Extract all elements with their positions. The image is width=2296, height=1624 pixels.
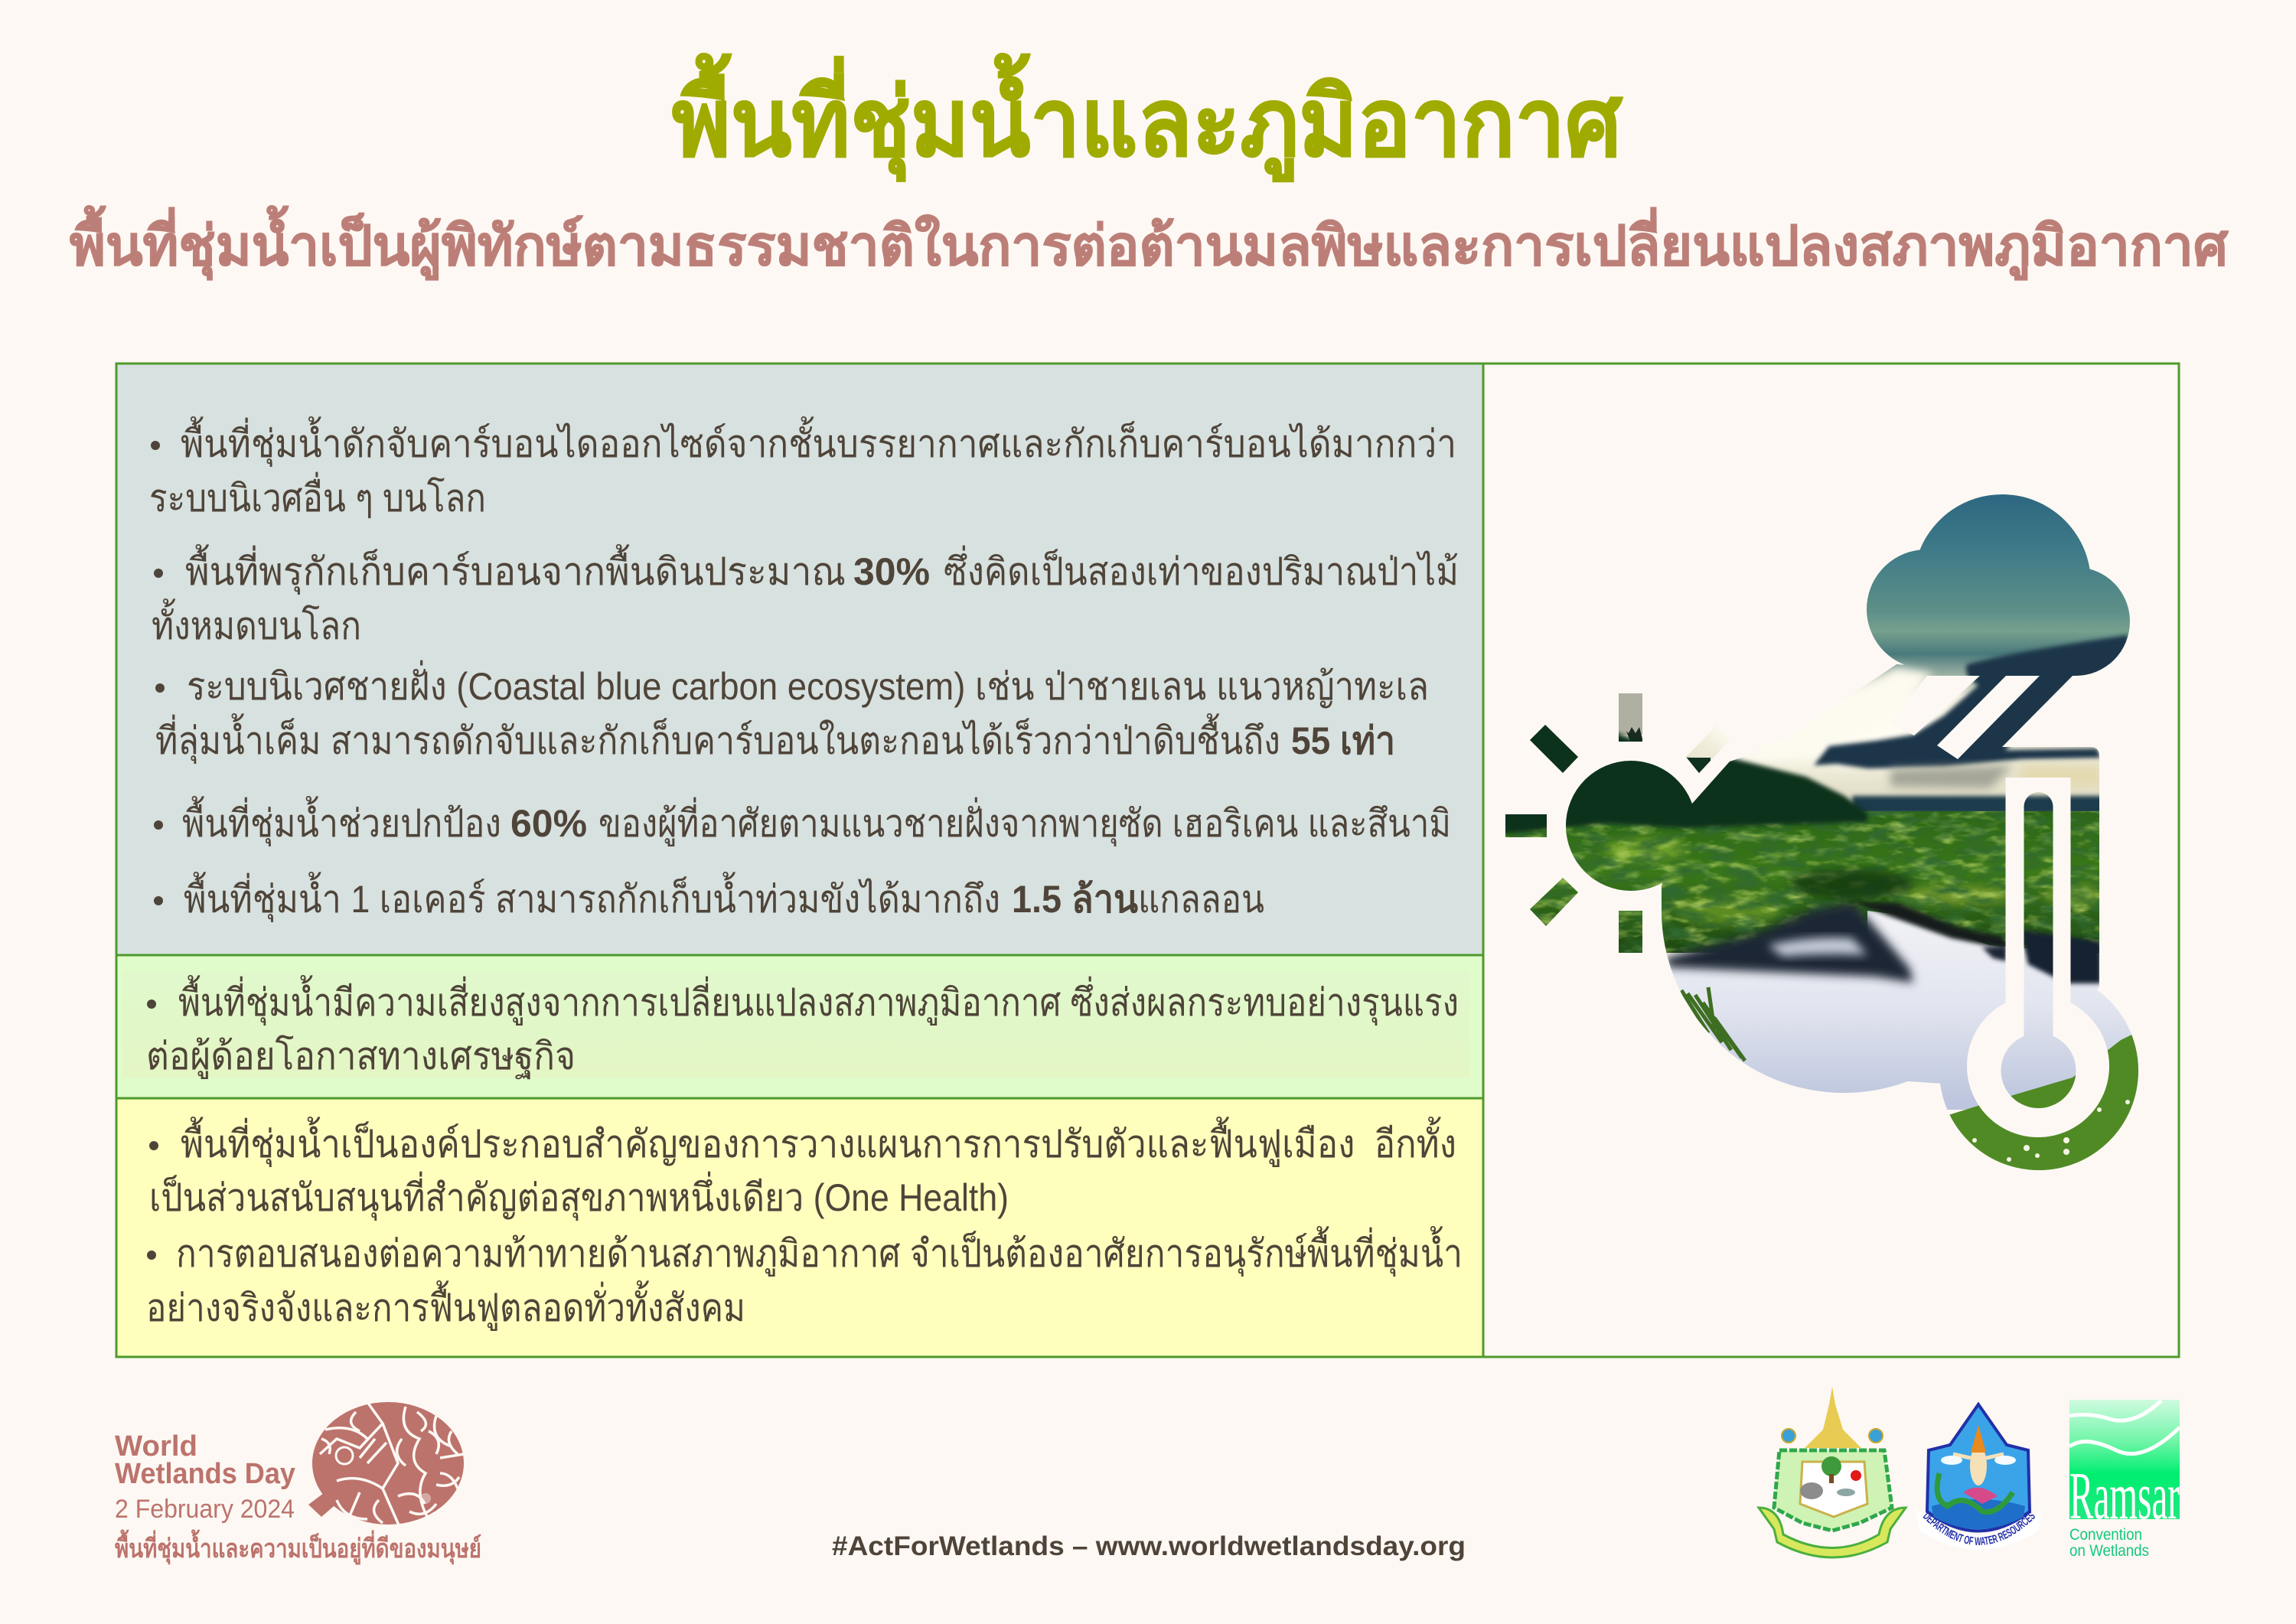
bullet: climate response: การตอบสนองต่อความท้าทายด้านสภาพภูมิอากาศ จำเป็นต้องอาศัยการอนุรักษ์พื้นที่ชุ่มน้ำ — [176, 1226, 1463, 1277]
bullet: peatlands 30%: พื้นที่พรุกักเก็บคาร์บอนจากพื้นดินประมาณ — [185, 544, 846, 595]
subtitle: พื้นที่ชุ่มน้ำเป็นผู้พิทักษ์ตามธรรมชาติในการต่อต้านมลพิษและการเปลี่ยนแปลงสภาพภูมิอากาศ — [70, 205, 2229, 281]
panel frame — [116, 364, 2179, 1357]
logo: World Wetlands Day: พื้นที่ชุ่มน้ำและความเป็นอยู่ที่ดีของมนุษย์ — [115, 1529, 481, 1565]
bullet: coastal protection 60%: ของผู้ที่อาศัยตามแนวชายฝั่งจากพายุซัด เฮอริเคน และสึนามิ — [598, 797, 1451, 846]
bullet: flood storage 1.5 million gallons: พื้นที่ชุ่มน้ำ 1 เอเคอร์ สามารถกักเก็บน้ำท่วมขังได้มากถึง — [184, 872, 1000, 922]
bullet: flood storage 1.5 million gallons: แกลลอน — [1138, 878, 1264, 921]
thermometer cutout — [1967, 778, 2109, 1137]
panel: adaptation and response — [116, 1098, 1483, 1357]
bullet: vulnerable people — [146, 975, 1459, 1079]
bullet: coastal blue carbon 55 times — [155, 660, 1429, 764]
bullet: peatlands 30%: ซึ่งคิดเป็นสองเท่าของปริมาณป่าไม้ — [944, 546, 1459, 593]
bullet: coastal blue carbon 55 times: ระบบนิเวศชายฝั่ง (Coastal blue carbon ecosystem) เช่น ป่าชายเลน แนวหญ้าทะเล — [187, 660, 1429, 708]
logo: provincial crest — [1759, 1387, 1906, 1557]
title: พื้นที่ชุ่มน้ำและภูมิอากาศ — [672, 53, 1623, 182]
bullet: coastal protection 60%: 60% — [510, 802, 587, 845]
logo: World Wetlands Day: World — [115, 1430, 197, 1463]
roundel emblem — [308, 1402, 464, 1527]
logo: Ramsar Convention on Wetlands — [2069, 1400, 2180, 1560]
bullet: coastal protection 60% — [154, 796, 1451, 846]
hashtag and website: #ActForWetlands – www.worldwetlandsday.org — [832, 1531, 1466, 1561]
bullet: urban adaptation: เป็นส่วนสนับสนุนที่สำคัญต่อสุขภาพหนึ่งเดียว (One Health) — [149, 1172, 1009, 1221]
lightning cutouts — [1890, 676, 2040, 759]
bullet: coastal blue carbon 55 times: ที่ลุ่มน้ำเค็ม สามารถดักจับและกักเก็บคาร์บอนในตะกอนได้เร็วกว่าป่าดิบชื้นถึง — [155, 713, 1280, 764]
bullet: carbon capture: พื้นที่ชุ่มน้ำดักจับคาร์บอนไดออกไซด์จากชั้นบรรยากาศและกักเก็บคาร์บอนได้มากกว่า — [181, 416, 1456, 467]
bullet: climate response: อย่างจริงจังและการฟื้นฟูตลอดทั่วทั้งสังคม — [146, 1280, 745, 1331]
bullet: climate response — [146, 1226, 1463, 1331]
logo: Department of Water Resources — [1916, 1402, 2041, 1550]
bullet: peatlands 30%: 30% — [853, 550, 930, 593]
bullet: coastal blue carbon 55 times: 55 เท่า — [1291, 719, 1395, 762]
bullet: vulnerable people: ต่อผู้ด้อยโอกาสทางเศรษฐกิจ — [146, 1035, 576, 1079]
logo: Ramsar Convention on Wetlands: Ramsar — [2069, 1459, 2180, 1534]
bullet: carbon capture: ระบบนิเวศอื่น ๆ บนโลก — [149, 472, 486, 520]
logo: Ramsar Convention on Wetlands: Convention — [2069, 1526, 2142, 1544]
bullet: urban adaptation: พื้นที่ชุ่มน้ำเป็นองค์ประกอบสำคัญของการวางแผนการการปรับตัวและฟื้นฟูเมือง อีกทั้ง — [181, 1117, 1456, 1167]
logo: World Wetlands Day — [115, 1402, 481, 1565]
bullet: carbon capture — [149, 416, 1456, 520]
bullet: coastal protection 60%: พื้นที่ชุ่มน้ำช่วยปกป้อง — [182, 796, 501, 846]
logo: Ramsar Convention on Wetlands: on Wetlands — [2069, 1542, 2149, 1560]
bullet: flood storage 1.5 million gallons — [154, 872, 1264, 922]
logo: Department of Water Resources: DEPARTMENT OF WATER RESOURCES — [1923, 1512, 2035, 1545]
bullet: peatlands 30% — [152, 544, 1459, 647]
bullet: flood storage 1.5 million gallons: 1.5 ล้าน — [1012, 878, 1138, 921]
bullet: vulnerable people: พื้นที่ชุ่มน้ำมีความเสี่ยงสูงจากการเปลี่ยนแปลงสภาพภูมิอากาศ ซึ่งส่งผลกระทบอย่างรุนแรง — [178, 975, 1459, 1026]
illustration: sun, cloud and thermometer filled with wetland photo — [1492, 482, 2151, 1179]
bullet: peatlands 30%: ทั้งหมดบนโลก — [152, 598, 361, 647]
panel: climate risk — [116, 955, 1483, 1098]
panel: carbon and protection facts — [116, 364, 1483, 955]
logo: World Wetlands Day: 2 February 2024 — [115, 1495, 295, 1524]
logo: World Wetlands Day: Wetlands Day — [115, 1458, 295, 1490]
bullet: urban adaptation — [149, 1117, 1456, 1221]
